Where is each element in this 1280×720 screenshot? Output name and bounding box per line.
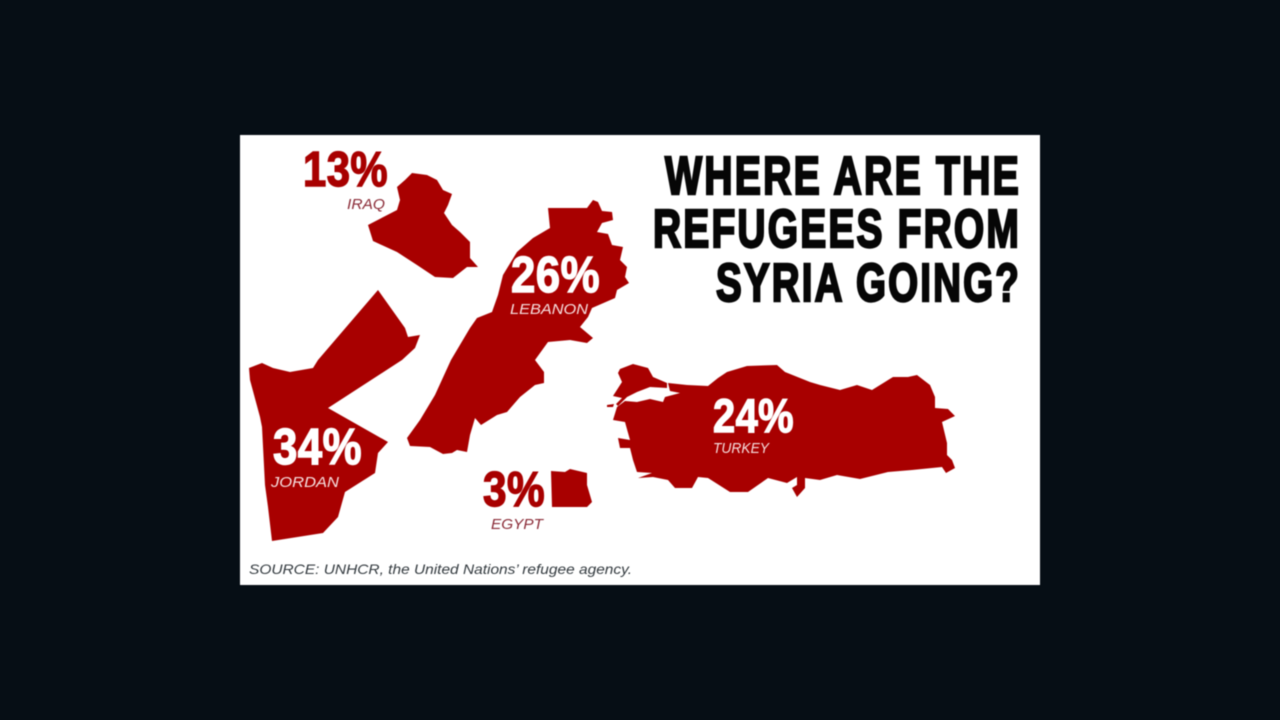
map: Jordan with 34%: JORDAN: [270, 475, 340, 491]
map: Iraq with 13%: 13%: [303, 143, 388, 197]
map: Lebanon with 26%: 26%: [511, 246, 600, 303]
source note: SOURCE: UNHCR, the United Nations’ refugee agency.: [249, 561, 632, 577]
map: Iraq with 13%: IRAQ: [347, 197, 385, 213]
title: REFUGEES FROM: [653, 199, 1021, 259]
map: Iraq with 13%: [303, 143, 478, 278]
map: Egypt with 3%: [483, 463, 592, 533]
title: [653, 146, 1021, 313]
title: WHERE ARE THE: [665, 146, 1021, 206]
map: Turkey with 24%: TURKEY: [713, 441, 770, 457]
map: Jordan with 34%: [249, 290, 420, 541]
title: SYRIA GOING?: [716, 253, 1021, 313]
panel: white card: [240, 135, 1040, 585]
map: Lebanon with 26%: [407, 200, 629, 454]
map: Turkey with 24%: [607, 364, 955, 497]
map: Lebanon with 26%: LEBANON: [510, 302, 589, 318]
map: Turkey with 24%: 24%: [713, 389, 794, 442]
map: Egypt with 3%: 3%: [483, 463, 545, 517]
map: Egypt with 3%: EGYPT: [491, 517, 544, 533]
map: Jordan with 34%: 34%: [273, 418, 362, 475]
